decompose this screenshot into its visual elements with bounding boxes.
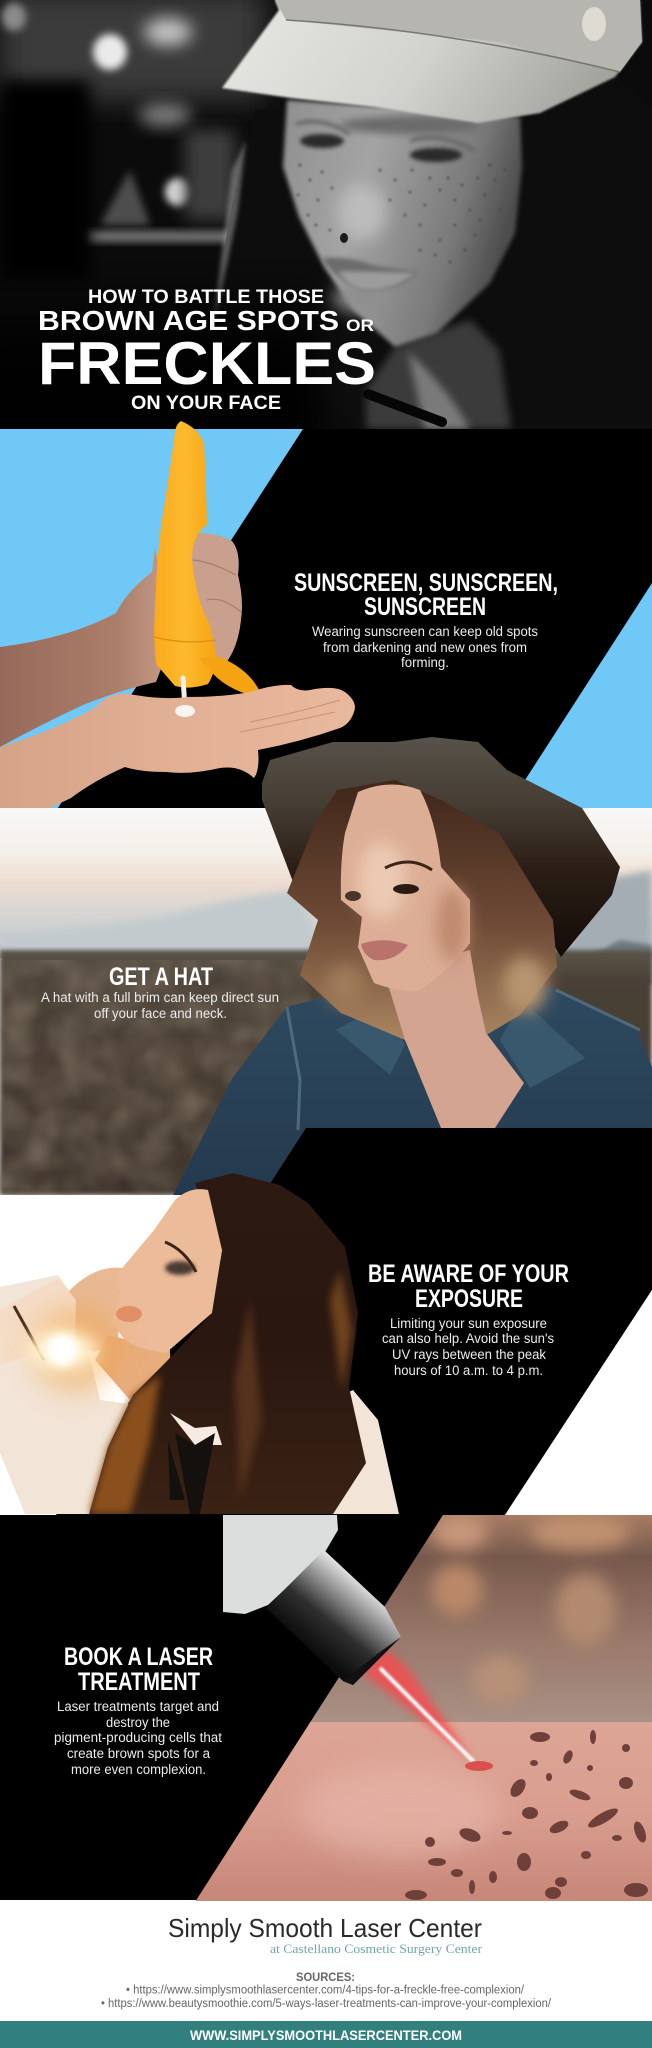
text: laser body: more even complexion.	[71, 1762, 206, 1777]
sources	[101, 1970, 552, 2010]
shirt	[0, 1275, 399, 1514]
eyes	[300, 134, 344, 148]
logo: at Castellano Cosmetic Surgery Center	[270, 1942, 483, 1956]
text: exposure body: Limiting your sun exposure	[390, 1316, 547, 1331]
heading: get a hat: GET A HAT	[109, 963, 213, 991]
freckles	[298, 165, 505, 262]
title	[38, 287, 376, 414]
face	[112, 1189, 222, 1353]
nostril and lips	[340, 233, 348, 243]
heading: sunscreen	[294, 569, 558, 621]
text: laser body: create brown spots for a	[67, 1746, 210, 1761]
panel: get a hat	[0, 737, 652, 1205]
lotion stream	[183, 678, 185, 708]
neck	[95, 1335, 170, 1400]
heading: exposure	[368, 1260, 569, 1313]
face	[283, 100, 522, 347]
hair	[89, 1173, 366, 1514]
hair	[287, 780, 557, 1040]
laser device	[223, 1515, 401, 1685]
text: sunscreen body: from darkening and new ones from	[323, 640, 527, 655]
blurred crowd background	[0, 0, 265, 280]
website bar	[0, 2021, 652, 2048]
text: sunscreen body	[312, 624, 538, 670]
hat	[262, 737, 620, 957]
title: FRECKLES	[38, 330, 376, 397]
lips	[361, 940, 408, 960]
title: OR	[346, 317, 374, 335]
text: laser body: pigment-producing cells that	[54, 1730, 222, 1745]
text: exposure body: hours of 10 a.m. to 4 p.m.	[394, 1363, 543, 1378]
ground	[0, 950, 652, 1205]
sources: • https://www.beautysmoothie.com/5-ways-laser-treatments-can-improve-your-complexion/	[101, 1998, 552, 2010]
text: exposure body: can also help. Avoid the sun's	[382, 1331, 554, 1346]
laser photo	[190, 1514, 652, 1902]
text: exposure body: UV rays between the peak	[392, 1347, 546, 1362]
logo: Simply Smooth Laser Center	[168, 1913, 482, 1943]
icon: lotion dab	[175, 705, 195, 717]
icon: white cap	[222, 0, 642, 123]
jacket	[173, 987, 652, 1195]
arm	[69, 1268, 122, 1352]
eyes	[393, 884, 419, 894]
panel: laser	[0, 1514, 652, 1902]
woman in sunlight	[0, 1173, 399, 1514]
neck and chest	[385, 950, 524, 1128]
heading: laser: TREATMENT	[78, 1668, 200, 1696]
laser beam	[362, 1648, 493, 1771]
fingers	[188, 533, 242, 668]
panel: sunscreen	[0, 421, 652, 808]
text: laser body: Laser treatments target and	[57, 1699, 219, 1714]
heading: laser	[64, 1643, 213, 1696]
text: exposure body	[382, 1316, 554, 1378]
sources: SOURCES:	[296, 1970, 355, 1984]
text: hat body: off your face and neck.	[94, 1006, 227, 1021]
text: sunscreen body: forming.	[401, 655, 449, 670]
heading: laser: BOOK A LASER	[64, 1643, 213, 1671]
title: HOW TO BATTLE THOSE	[88, 287, 324, 308]
brown spots	[405, 1730, 648, 1900]
logo	[168, 1913, 483, 1956]
text: hat body	[41, 990, 279, 1021]
heading: exposure: BE AWARE OF YOUR	[368, 1260, 569, 1288]
panel: exposure	[0, 1128, 652, 1515]
collar and ribbon	[170, 1413, 222, 1445]
text: laser body: destroy the	[106, 1715, 170, 1730]
hair	[225, 182, 242, 246]
neck and necklace	[366, 320, 511, 429]
face	[341, 784, 470, 992]
woman with hat	[173, 737, 652, 1195]
bracelet	[14, 1306, 44, 1360]
upper arm and hand	[0, 548, 172, 747]
heading: sunscreen: SUNSCREEN, SUNSCREEN,	[294, 569, 558, 597]
text: sunscreen body: Wearing sunscreen can keep old spots	[312, 624, 538, 639]
heading: exposure: EXPOSURE	[415, 1285, 523, 1313]
sources: • https://www.simplysmoothlasercenter.com/4-tips-for-a-freckle-free-complexion/	[126, 1984, 525, 1996]
text: laser body	[54, 1699, 222, 1777]
website bar: WWW.SIMPLYSMOOTHLASERCENTER.COM	[190, 2027, 462, 2043]
icon: sunscreen bottle	[154, 421, 260, 697]
panel: footer	[0, 1901, 652, 2048]
heading: sunscreen: SUNSCREEN	[364, 593, 486, 621]
panel: header photo	[0, 0, 652, 462]
distant mountains	[0, 870, 652, 985]
title: ON YOUR FACE	[131, 393, 281, 414]
lower hand	[0, 685, 355, 808]
title: BROWN AGE SPOTS	[38, 305, 339, 336]
sun flare	[26, 1308, 117, 1392]
text: hat body: A hat with a full brim can keep direct sun	[41, 990, 279, 1005]
